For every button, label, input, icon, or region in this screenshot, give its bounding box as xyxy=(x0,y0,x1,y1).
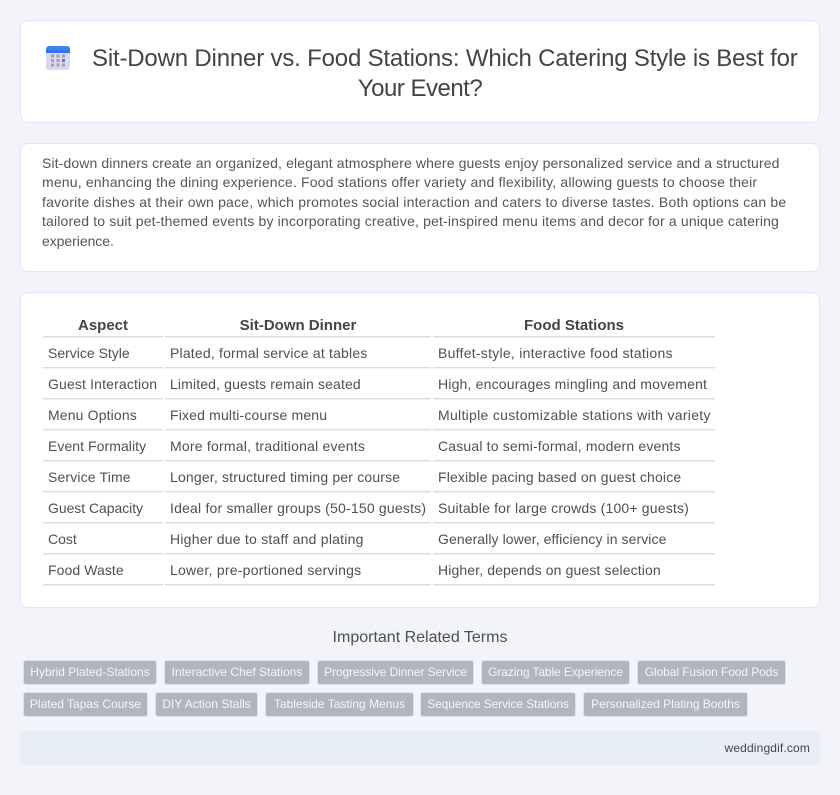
icon: calendar xyxy=(46,46,70,70)
description text: experience. xyxy=(42,233,114,249)
footer bar xyxy=(20,731,820,765)
comparison table: Longer, structured timing per course xyxy=(170,469,400,485)
footer source: weddingdif.com xyxy=(725,741,810,755)
comparison table: Limited, guests remain seated xyxy=(170,376,361,392)
title xyxy=(92,45,798,102)
comparison table: Generally lower, efficiency in service xyxy=(438,531,666,547)
comparison table: Service Style xyxy=(48,345,130,361)
description text: favorite dishes at their own pace, which promotes social interaction and caters to diverse tastes. Both options can be xyxy=(42,194,786,210)
related term tags: Progressive Dinner Service xyxy=(324,665,467,679)
comparison table: Guest Capacity xyxy=(48,500,143,516)
related term tags: Personalized Plating Booths xyxy=(591,697,740,711)
description text: Sit-down dinners create an organized, elegant atmosphere where guests enjoy personalized service and a structured xyxy=(42,155,780,171)
related term tags: Hybrid Plated-Stations xyxy=(30,665,150,679)
comparison table: Food Waste xyxy=(48,562,124,578)
title: Your Event? xyxy=(358,75,482,102)
comparison table: Casual to semi-formal, modern events xyxy=(438,438,681,454)
comparison table: Lower, pre-portioned servings xyxy=(170,562,361,578)
comparison table: Guest Interaction xyxy=(48,376,157,392)
related term tags: Global Fusion Food Pods xyxy=(645,665,778,679)
description text xyxy=(42,155,786,249)
comparison table: Aspect xyxy=(78,317,128,334)
related term tags xyxy=(23,660,786,717)
comparison table: More formal, traditional events xyxy=(170,438,365,454)
description text: menu, enhancing the dining experience. Food stations offer variety and flexibility, allowing guests to choose their xyxy=(42,174,757,190)
comparison table: Fixed multi-course menu xyxy=(170,407,327,423)
comparison table: Food Stations xyxy=(524,317,624,334)
related term tags: DIY Action Stalls xyxy=(162,697,251,711)
related term tags: Tableside Tasting Menus xyxy=(274,697,405,711)
related term tags: Grazing Table Experience xyxy=(488,665,623,679)
comparison table: Flexible pacing based on guest choice xyxy=(438,469,681,485)
comparison table: Buffet-style, interactive food stations xyxy=(438,345,673,361)
header panel xyxy=(20,20,820,123)
comparison table: Cost xyxy=(48,531,77,547)
comparison table: Menu Options xyxy=(48,407,137,423)
comparison table: Ideal for smaller groups (50-150 guests) xyxy=(170,500,426,516)
comparison table: Sit-Down Dinner xyxy=(240,317,356,334)
comparison table: Multiple customizable stations with variety xyxy=(438,407,711,423)
comparison table: Service Time xyxy=(48,469,131,485)
description text: tailored to suit pet-themed events by incorporating creative, pet-inspired menu items and decor for a unique catering xyxy=(42,213,779,229)
heading: related terms: Important Related Terms xyxy=(333,629,507,646)
related term tags: Interactive Chef Stations xyxy=(172,665,302,679)
title: Sit-Down Dinner vs. Food Stations: Which Catering Style is Best for xyxy=(92,45,798,72)
comparison table: Plated, formal service at tables xyxy=(170,345,368,361)
comparison table: Event Formality xyxy=(48,438,146,454)
comparison table: High, encourages mingling and movement xyxy=(438,376,707,392)
comparison table: Suitable for large crowds (100+ guests) xyxy=(438,500,689,516)
related term tags: Plated Tapas Course xyxy=(30,697,141,711)
comparison table: Higher, depends on guest selection xyxy=(438,562,661,578)
panel: description xyxy=(20,143,820,272)
comparison table: Higher due to staff and plating xyxy=(170,531,364,547)
comparison table xyxy=(43,317,715,586)
related term tags: Sequence Service Stations xyxy=(427,697,569,711)
panel: comparison table xyxy=(20,292,820,608)
